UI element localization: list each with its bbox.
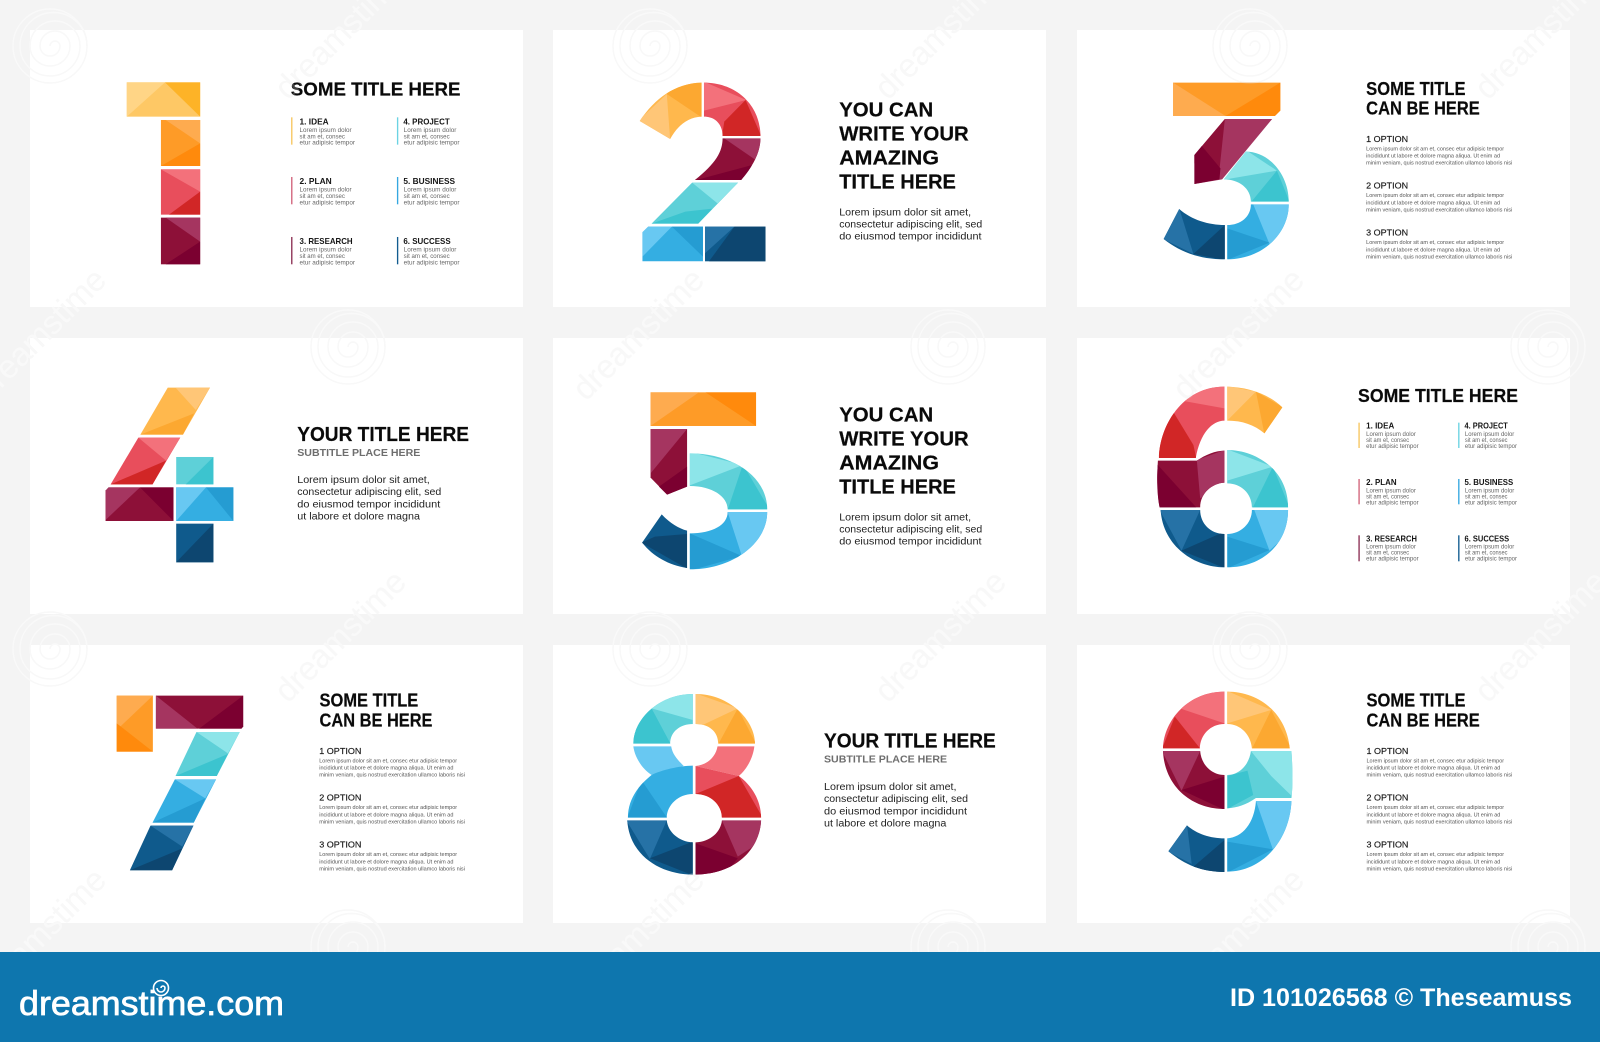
digit 8 segment: red lower right	[696, 766, 763, 818]
heading	[320, 690, 432, 730]
footer logo: dreamstime.com	[19, 985, 284, 1023]
heading and subtitle: YOUR TITLE HERE	[297, 424, 469, 446]
item 3: 3. RESEARCH	[1366, 533, 1417, 543]
body text: consectetur adipiscing elit, sed	[297, 487, 441, 498]
digit 7 segment: orange block	[117, 696, 153, 752]
heading: SOME TITLE	[320, 690, 418, 711]
option 3: 3 OPTION	[1367, 840, 1408, 850]
body text: consectetur adipiscing elit, sed	[839, 524, 982, 535]
body text	[297, 475, 441, 522]
item 4: Lorem ipsum dolor	[1465, 432, 1514, 438]
heading	[839, 404, 969, 499]
item 2: sit am et, consec	[300, 194, 345, 200]
digit 2 numeral	[638, 82, 766, 261]
item 4: etur adipisic tempor	[404, 141, 459, 147]
item 2: Lorem ipsum dolor	[300, 188, 352, 194]
panel: slide 6	[1077, 338, 1570, 614]
body text: ut labore et dolore magna	[297, 511, 420, 522]
item 2	[291, 176, 355, 206]
option 3: minim veniam, quis nostrud exercitation ullamco laboris nisi	[1366, 254, 1512, 260]
digit 8 segment: teal top left	[632, 693, 693, 744]
heading: SOME TITLE HERE	[291, 79, 460, 100]
option 2: Lorem ipsum dolor sit am et, consec etur adipisic tempor	[1366, 193, 1504, 199]
digit 8 segment: sky lower left	[627, 766, 693, 818]
heading and subtitle: YOUR TITLE HERE	[824, 731, 996, 753]
body text: Lorem ipsum dolor sit amet,	[297, 475, 430, 486]
option 2	[1366, 181, 1512, 213]
heading: YOU CAN	[839, 404, 933, 426]
item 3: etur adipisic tempor	[300, 260, 355, 266]
item 2: etur adipisic tempor	[1366, 500, 1419, 506]
heading: WRITE YOUR	[839, 429, 969, 451]
item 5	[1458, 477, 1517, 506]
digit 2 segment: sky base	[642, 227, 703, 261]
item 1: sit am et, consec	[1366, 438, 1409, 444]
item 2: sit am et, consec	[1366, 494, 1409, 500]
digit 6 numeral	[1156, 385, 1290, 568]
digit 7 segment: sky diagonal	[153, 779, 216, 823]
digit 5 segment: sky arc	[690, 512, 768, 571]
option 2	[1367, 793, 1512, 825]
image id and credit: ID 101026568 © Theseamuss	[1230, 984, 1572, 1012]
panel: slide 2	[553, 30, 1046, 307]
item 5: 5. BUSINESS	[403, 176, 455, 186]
digit 1 segment: red	[161, 169, 200, 215]
panel: slide 1	[30, 30, 523, 307]
heading and subtitle: SUBTITLE PLACE HERE	[824, 755, 947, 766]
digit 8 segment: light red waist	[696, 746, 754, 776]
body text: Lorem ipsum dolor sit amet,	[839, 207, 971, 218]
digit 3 numeral	[1163, 83, 1290, 260]
digit 7 segment: crimson bar	[156, 696, 243, 729]
item 5: Lorem ipsum dolor	[404, 188, 456, 194]
digit 1 segment: orange	[161, 120, 200, 166]
digit 9 segment: navy arc	[1167, 825, 1225, 873]
digit 4 segment: yellow diagonal	[140, 388, 210, 435]
digit 2 segment: red arc	[704, 82, 761, 137]
digit 4 numeral	[106, 388, 233, 562]
digit 5 segment: crimson stem	[651, 429, 687, 495]
digit 6 segment: crimson	[1156, 450, 1225, 508]
digit 6 segment: teal arc	[1227, 449, 1290, 508]
digit 4 segment: red diagonal	[111, 438, 180, 484]
item 4: 4. PROJECT	[1465, 421, 1508, 431]
item 5: Lorem ipsum dolor	[1465, 488, 1514, 494]
option 2: Lorem ipsum dolor sit am et, consec etur adipisic tempor	[1367, 805, 1504, 811]
digit 7 segment: navy diagonal	[130, 826, 193, 870]
body text	[824, 782, 968, 829]
heading and subtitle: SUBTITLE PLACE HERE	[297, 448, 420, 459]
panel: slide 5	[553, 338, 1046, 614]
item 6: sit am et, consec	[1465, 551, 1508, 557]
digit 8 segment: light blue waist	[633, 746, 684, 775]
panel: slide 9	[1077, 645, 1570, 923]
option 3: incididunt ut labore et dolore magna aliqua. Ut enim ad	[1367, 859, 1501, 865]
digit 4 segment: teal block	[176, 457, 213, 484]
digit 5 numeral	[641, 392, 770, 571]
option 3: incididunt ut labore et dolore magna aliqua. Ut enim ad	[319, 859, 454, 865]
body text: do eiusmod tempor incididunt	[839, 231, 982, 242]
digit 7 numeral	[117, 696, 243, 870]
digit 4 segment: sky block	[176, 487, 233, 521]
option 3	[1366, 228, 1512, 260]
item 1: Lorem ipsum dolor	[1366, 432, 1416, 438]
option 1: incididunt ut labore et dolore magna aliqua. Ut enim ad	[319, 766, 454, 772]
item 6: 6. SUCCESS	[403, 236, 451, 246]
item 6: sit am et, consec	[404, 254, 450, 260]
option 3	[1367, 840, 1512, 872]
digit 3 segment: crimson diagonal	[1194, 119, 1272, 184]
item 4: sit am et, consec	[1465, 438, 1508, 444]
heading	[839, 99, 969, 193]
digit 9 segment: sky	[1227, 801, 1292, 873]
option 1: 1 OPTION	[1367, 746, 1408, 756]
item 3: sit am et, consec	[1366, 551, 1409, 557]
heading and subtitle	[297, 424, 469, 459]
item 1: 1. IDEA	[300, 116, 329, 126]
option 3: Lorem ipsum dolor sit am et, consec etur adipisic tempor	[1367, 852, 1504, 858]
option 1: incididunt ut labore et dolore magna aliqua. Ut enim ad	[1367, 766, 1501, 772]
digit 6 segment: navy arc	[1160, 510, 1225, 568]
digit 9 numeral	[1162, 690, 1294, 873]
option 1	[319, 746, 465, 779]
digit 7 segment: teal diagonal	[176, 732, 240, 776]
digit 3 segment: teal arc	[1222, 150, 1290, 202]
item 1: etur adipisic tempor	[300, 141, 355, 147]
heading: WRITE YOUR	[839, 123, 969, 145]
list of six items	[291, 116, 459, 266]
body text: consectetur adipiscing elit, sed	[839, 219, 982, 230]
body text: do eiusmod tempor incididunt	[824, 806, 967, 817]
heading and subtitle	[824, 731, 996, 766]
heading: SOME TITLE	[1366, 78, 1466, 99]
item 1: 1. IDEA	[1366, 421, 1395, 431]
item 1	[1358, 421, 1419, 450]
digit 2 segment: crimson	[694, 138, 761, 181]
option 3	[319, 840, 465, 872]
body text: do eiusmod tempor incididunt	[297, 499, 440, 510]
option 3: Lorem ipsum dolor sit am et, consec etur adipisic tempor	[319, 852, 458, 858]
item 2: 2. PLAN	[1366, 477, 1397, 487]
item 1: etur adipisic tempor	[1366, 444, 1419, 450]
item 3: Lorem ipsum dolor	[1366, 545, 1416, 551]
digit 2 segment: yellow arc	[638, 82, 702, 140]
item 5: sit am et, consec	[404, 194, 450, 200]
item 1: Lorem ipsum dolor	[300, 128, 352, 134]
item 2: Lorem ipsum dolor	[1366, 488, 1416, 494]
item 3	[291, 236, 355, 266]
item 5	[397, 176, 459, 206]
option 3: minim veniam, quis nostrud exercitation ullamco laboris nisi	[1367, 866, 1512, 872]
digit 8 segment: yellow top right	[696, 693, 756, 744]
item 3: etur adipisic tempor	[1366, 557, 1419, 563]
item 2	[1358, 477, 1419, 506]
item 2: etur adipisic tempor	[300, 200, 355, 206]
digit 2 segment: teal diagonal	[652, 183, 738, 224]
heading	[1366, 78, 1480, 119]
option 2: incididunt ut labore et dolore magna aliqua. Ut enim ad	[319, 812, 454, 818]
body text: Lorem ipsum dolor sit amet,	[839, 512, 971, 523]
option 2	[319, 793, 465, 825]
option 2: minim veniam, quis nostrud exercitation ullamco laboris nisi	[319, 819, 465, 825]
option 3: 3 OPTION	[1366, 228, 1408, 238]
heading: TITLE HERE	[839, 171, 956, 193]
item 1	[291, 116, 355, 147]
body text: do eiusmod tempor incididunt	[839, 537, 982, 548]
option 3: Lorem ipsum dolor sit am et, consec etur adipisic tempor	[1366, 240, 1504, 246]
digit 9 segment: crimson arc	[1162, 751, 1225, 810]
digit 5 segment: navy arc	[641, 514, 687, 569]
digit 6 segment: yellow arc	[1227, 386, 1283, 434]
digit 9 segment: red arc	[1162, 690, 1225, 749]
option 2: minim veniam, quis nostrud exercitation ullamco laboris nisi	[1367, 819, 1512, 825]
digit 4 segment: crimson bar	[106, 487, 173, 521]
body text	[839, 207, 982, 242]
digit 8 segment: navy bottom left	[626, 820, 693, 875]
option 1: 1 OPTION	[1366, 134, 1408, 144]
digit 8 numeral	[626, 693, 763, 876]
item 3: 3. RESEARCH	[300, 236, 353, 246]
digit 1 segment: yellow flag	[127, 82, 200, 117]
item 6	[1458, 533, 1517, 563]
heading: SOME TITLE	[1367, 690, 1466, 711]
digit 3 segment: sky arc	[1227, 204, 1290, 260]
digit 5 segment: teal arc	[690, 452, 770, 510]
heading: SOME TITLE HERE	[1358, 385, 1518, 406]
digit 2 segment: navy base	[705, 227, 766, 261]
item 6	[397, 236, 459, 266]
option 1: Lorem ipsum dolor sit am et, consec etur adipisic tempor	[319, 758, 458, 764]
item 5: etur adipisic tempor	[1465, 500, 1517, 506]
options list	[1367, 746, 1512, 872]
option 2: 2 OPTION	[1366, 181, 1408, 191]
item 4	[397, 116, 459, 147]
options list	[319, 746, 465, 872]
heading: TITLE HERE	[839, 477, 956, 499]
option 2: minim veniam, quis nostrud exercitation ullamco laboris nisi	[1366, 207, 1512, 213]
option 1	[1367, 746, 1512, 779]
digit 4 segment: navy block	[176, 524, 213, 562]
item 4: sit am et, consec	[404, 134, 450, 140]
digit 9 segment: teal	[1227, 751, 1294, 809]
option 1: Lorem ipsum dolor sit am et, consec etur adipisic tempor	[1367, 758, 1504, 764]
item 6: 6. SUCCESS	[1465, 533, 1509, 543]
list of six items	[1358, 421, 1517, 563]
heading: AMAZING	[839, 453, 939, 475]
item 6: Lorem ipsum dolor	[1465, 545, 1514, 551]
option 1: minim veniam, quis nostrud exercitation ullamco laboris nisi	[319, 773, 465, 779]
option 2: 2 OPTION	[319, 793, 361, 803]
item 5: 5. BUSINESS	[1465, 477, 1513, 487]
panel: slide 7	[30, 645, 523, 923]
option 3: incididunt ut labore et dolore magna aliqua. Ut enim ad	[1366, 247, 1500, 253]
item 6: etur adipisic tempor	[1465, 557, 1517, 563]
option 2: Lorem ipsum dolor sit am et, consec etur adipisic tempor	[319, 805, 458, 811]
item 3	[1358, 533, 1419, 563]
digit 3 segment: orange bar	[1173, 83, 1280, 116]
heading	[1367, 690, 1480, 730]
option 1: incididunt ut labore et dolore magna aliqua. Ut enim ad	[1366, 154, 1500, 160]
panel: slide 3	[1077, 30, 1570, 307]
digit 1 numeral	[127, 82, 200, 264]
footer bar	[0, 952, 1600, 1042]
item 5: etur adipisic tempor	[404, 200, 459, 206]
digit 6 segment: red arc	[1158, 385, 1225, 459]
option 1: Lorem ipsum dolor sit am et, consec etur adipisic tempor	[1366, 146, 1504, 152]
heading: CAN BE HERE	[320, 709, 432, 730]
item 3: Lorem ipsum dolor	[300, 248, 352, 254]
body text: Lorem ipsum dolor sit amet,	[824, 782, 957, 793]
heading: YOU CAN	[839, 99, 933, 121]
heading: AMAZING	[839, 147, 939, 169]
item 4: 4. PROJECT	[403, 116, 450, 126]
item 1: sit am et, consec	[300, 134, 345, 140]
item 4: Lorem ipsum dolor	[404, 128, 456, 134]
option 1: minim veniam, quis nostrud exercitation ullamco laboris nisi	[1366, 161, 1512, 167]
item 4	[1458, 421, 1517, 450]
digit 9 segment: yellow arc	[1227, 691, 1291, 749]
digit 3 segment: navy arc	[1163, 208, 1225, 260]
icon: spiral	[154, 980, 168, 996]
body text: ut labore et dolore magna	[824, 818, 947, 829]
body text	[839, 512, 982, 548]
heading: CAN BE HERE	[1366, 98, 1480, 119]
option 1	[1366, 134, 1512, 167]
body text: consectetur adipiscing elit, sed	[824, 794, 968, 805]
panel: slide 8	[553, 645, 1046, 923]
digit 1 segment: crimson	[161, 218, 200, 264]
item 4: etur adipisic tempor	[1465, 444, 1517, 450]
digit 6 segment: sky arc	[1227, 510, 1289, 568]
option 2: incididunt ut labore et dolore magna aliqua. Ut enim ad	[1366, 200, 1500, 206]
item 2: 2. PLAN	[300, 176, 332, 186]
item 3: sit am et, consec	[300, 254, 345, 260]
item 6: etur adipisic tempor	[404, 260, 459, 266]
digit 8 segment: crimson bottom right	[696, 820, 762, 876]
option 2: 2 OPTION	[1367, 793, 1408, 803]
option 1: minim veniam, quis nostrud exercitation ullamco laboris nisi	[1367, 773, 1512, 779]
panel: slide 4	[30, 338, 523, 614]
option 3: minim veniam, quis nostrud exercitation ullamco laboris nisi	[319, 866, 465, 872]
item 6: Lorem ipsum dolor	[404, 248, 456, 254]
heading: CAN BE HERE	[1367, 709, 1480, 730]
item 5: sit am et, consec	[1465, 494, 1508, 500]
option 1: 1 OPTION	[319, 746, 361, 756]
digit 5 segment: orange bar	[651, 392, 756, 426]
option 3: 3 OPTION	[319, 840, 361, 850]
options list	[1366, 134, 1512, 260]
option 2: incididunt ut labore et dolore magna aliqua. Ut enim ad	[1367, 812, 1501, 818]
